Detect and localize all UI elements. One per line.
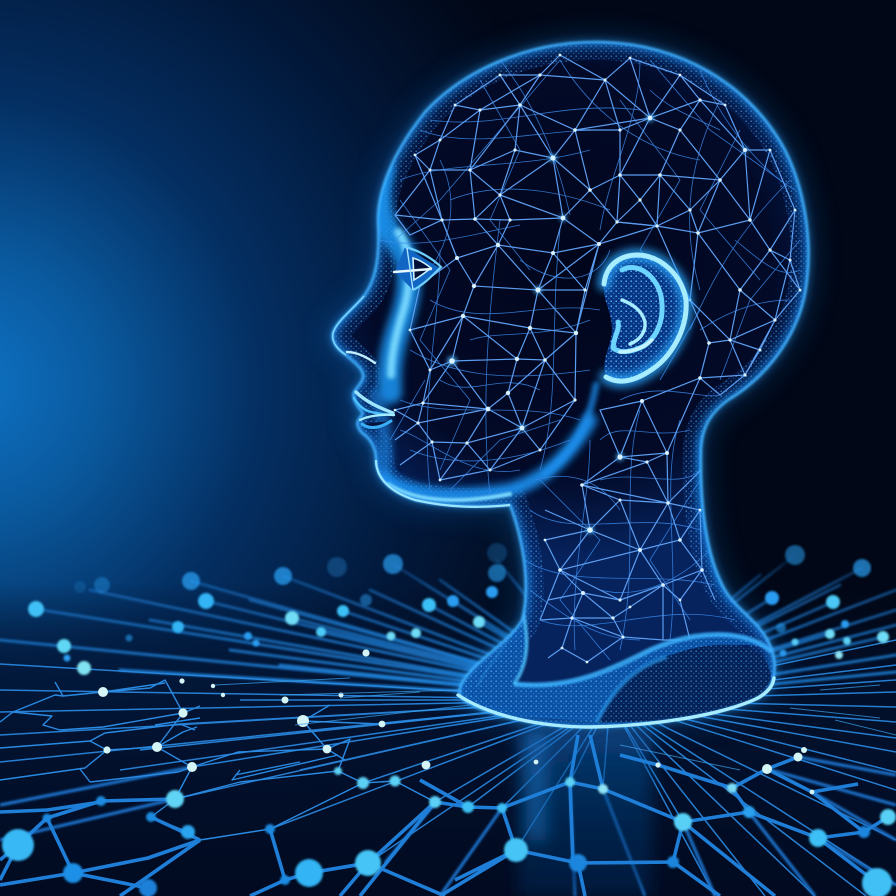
fine far floor line accents xyxy=(215,678,896,770)
reflection column under the head xyxy=(518,728,652,896)
radial floor lines xyxy=(0,640,896,896)
stippled rim texture xyxy=(333,42,809,727)
face glow band xyxy=(375,170,596,500)
head dark fill xyxy=(320,30,820,730)
head bright outline xyxy=(333,42,809,727)
ear xyxy=(604,255,686,381)
thick near hexagon edges xyxy=(0,735,888,896)
thick lower radial spokes xyxy=(0,757,896,896)
head: wireframe figure xyxy=(320,30,820,730)
head outer glow halo xyxy=(333,42,809,727)
main mesh lines xyxy=(395,55,800,662)
soft floor nodes xyxy=(2,543,896,896)
far blurred floor network xyxy=(0,555,896,700)
hexagonal network near the viewer xyxy=(0,680,888,896)
neck and collar rim glow xyxy=(478,440,735,685)
inner rim glow xyxy=(333,42,809,727)
base shoulder shape xyxy=(458,610,772,722)
nose nostril highlight xyxy=(347,352,375,363)
head mesh nodes xyxy=(394,54,801,663)
thin far hexagon edges xyxy=(0,680,502,840)
eye xyxy=(394,247,441,290)
fine secondary mesh xyxy=(380,60,800,660)
lips xyxy=(354,392,394,428)
bright small floor nodes xyxy=(98,649,814,794)
